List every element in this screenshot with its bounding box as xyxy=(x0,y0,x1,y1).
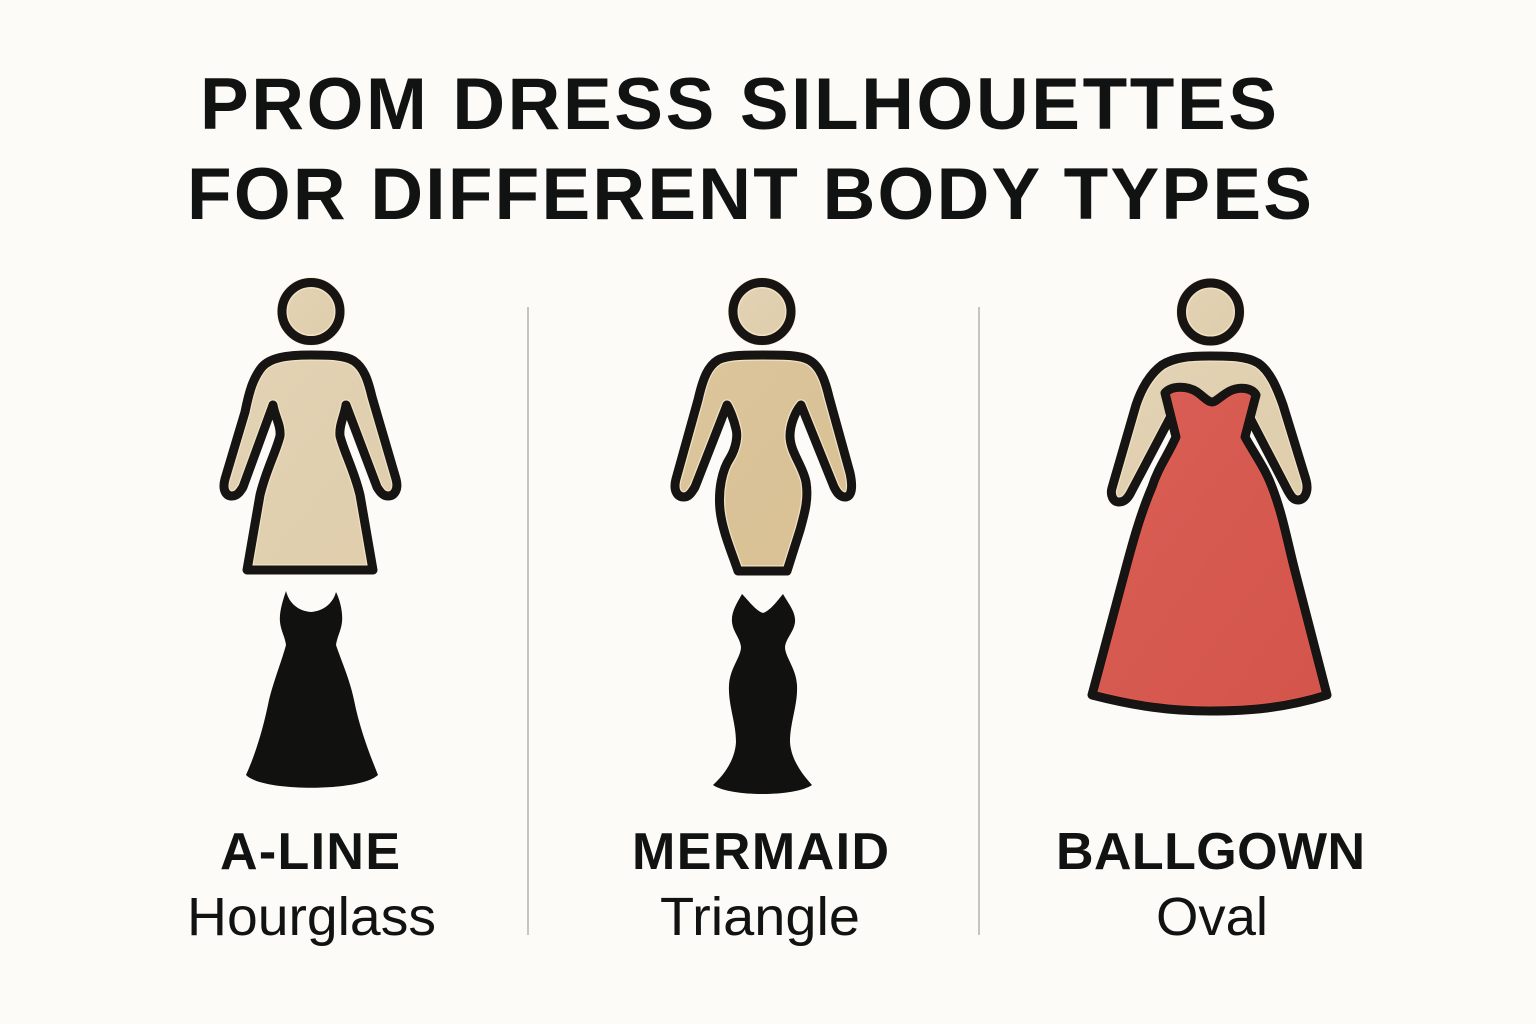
icon: hourglass figure xyxy=(224,282,397,570)
title: FOR DIFFERENT BODY TYPES xyxy=(187,154,1312,235)
icon: triangle figure xyxy=(675,282,852,571)
label: Hourglass: Hourglass xyxy=(187,887,436,947)
icon: A-line dress xyxy=(246,591,378,788)
label: Oval: Oval xyxy=(1156,887,1268,947)
label: A-line: A-LINE xyxy=(220,823,400,881)
label: Mermaid: MERMAID xyxy=(632,823,889,881)
panel: Ballgown xyxy=(1056,283,1365,947)
label: Triangle: Triangle xyxy=(660,887,860,947)
panel: Mermaid xyxy=(632,282,889,947)
label: Ballgown: BALLGOWN xyxy=(1056,823,1365,881)
icon: ballgown dress xyxy=(1092,387,1327,711)
title: PROM DRESS SILHOUETTES xyxy=(200,64,1277,145)
title xyxy=(187,64,1312,235)
icon: mermaid dress xyxy=(713,594,812,794)
icon: oval figure arms xyxy=(1111,283,1307,502)
panel: A-line xyxy=(187,282,436,947)
